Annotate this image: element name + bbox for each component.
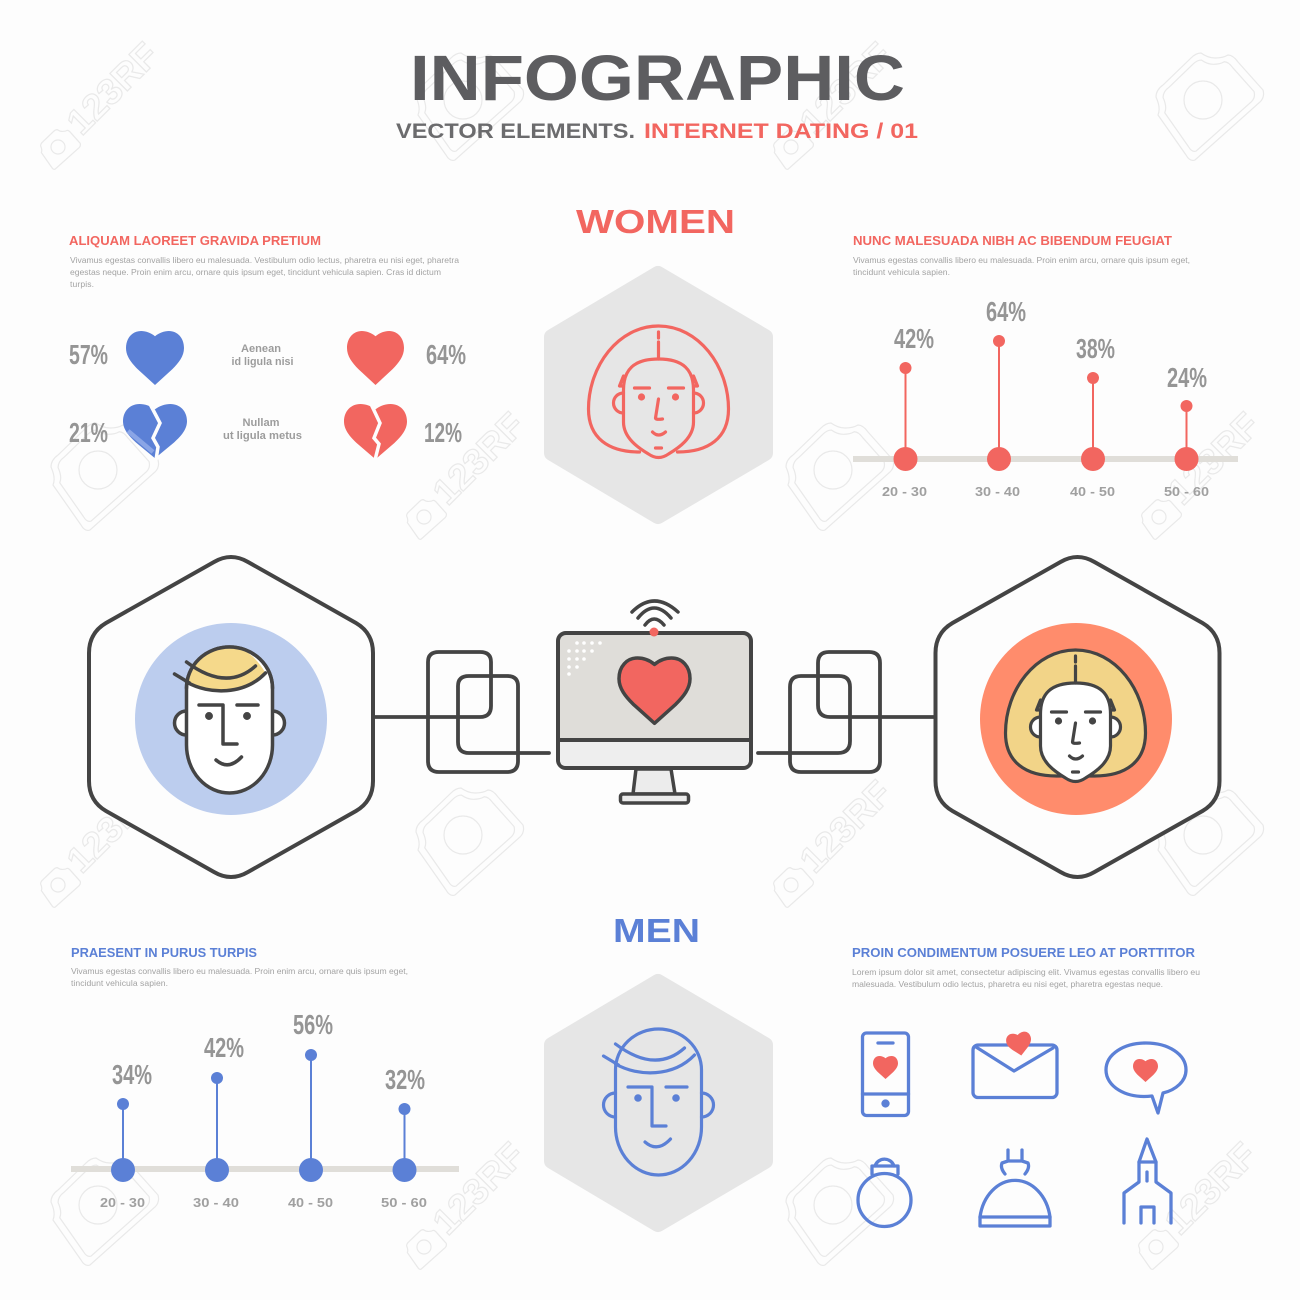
- chart: men lollipop chart: [71, 1009, 459, 1210]
- icon: man colored face: [174, 647, 284, 793]
- chart: women lollipop chart: 40 - 50: [1070, 485, 1115, 499]
- chart: women lollipop chart: 64%: [986, 296, 1026, 327]
- chart: women lollipop chart: 38%: [1076, 333, 1115, 364]
- icon: ring: [858, 1159, 911, 1226]
- stat: 57 percent: 57%: [69, 339, 108, 370]
- chart: men lollipop chart: 32%: [385, 1064, 425, 1095]
- icon: monitor heart: [619, 658, 690, 723]
- chart: men lollipop chart: 50 - 60: [381, 1196, 427, 1210]
- text block: hearts heading: [69, 233, 459, 289]
- label: nullam: Nullam: [242, 417, 280, 429]
- panel: men icons: [852, 945, 1200, 1226]
- panel: women hearts: [69, 233, 466, 460]
- label: nullam: [223, 417, 302, 442]
- icon: envelope: [973, 1031, 1057, 1098]
- chart: men lollipop chart: 34%: [112, 1059, 152, 1090]
- text block: women chart heading: tincidunt vehicula sapien.: [853, 267, 950, 277]
- panel: computer monitor: [558, 601, 751, 803]
- title: INFOGRAPHIC: [410, 42, 905, 114]
- text block: icons heading: Lorem ipsum dolor sit amet, consectetur adipiscing elit. Vivamus egestas convallis libero eu: [852, 967, 1200, 977]
- text: 123RF: [1156, 1134, 1264, 1242]
- text: 123RF: [424, 1134, 532, 1242]
- text: 123RF: [791, 34, 899, 142]
- icon: monitor stand: [620, 769, 688, 803]
- chart: men lollipop chart: 20 - 30: [100, 1196, 145, 1210]
- text block: hearts heading: turpis.: [70, 279, 94, 289]
- chart: women lollipop chart: 20 - 30: [882, 485, 927, 499]
- icon: woman colored face: [1006, 650, 1146, 782]
- panel: men age chart: [71, 945, 459, 1210]
- chart: women lollipop chart: 50 - 60: [1164, 485, 1209, 499]
- text block: women chart heading: NUNC MALESUADA NIBH AC BIBENDUM FEUGIAT: [853, 233, 1172, 248]
- chart: women lollipop chart: [853, 296, 1238, 499]
- stat: 64 percent: 64%: [426, 339, 466, 370]
- icon: red broken heart: [344, 404, 407, 460]
- text block: men chart heading: tincidunt vehicula sapien.: [71, 978, 168, 988]
- heading: men: MEN: [613, 912, 700, 949]
- panel: man hexagon: [89, 557, 373, 877]
- arrow: right connector cable: [758, 652, 935, 772]
- chart: men lollipop chart: 30 - 40: [193, 1196, 239, 1210]
- label: aenean: id ligula nisi: [232, 356, 294, 368]
- stat: 12 percent: 12%: [424, 417, 462, 448]
- text block: men chart heading: [71, 945, 408, 988]
- panel: woman portrait hexagon: [552, 274, 765, 516]
- icon: webcam dot: [650, 628, 658, 636]
- icon: phone: [862, 1033, 908, 1116]
- text: 123RF: [58, 34, 166, 142]
- icon: blue broken heart: [123, 404, 187, 460]
- text block: men chart heading: Vivamus egestas convallis libero eu malesuada. Proin enim arcu, ornare quis ipsum eget,: [71, 966, 408, 976]
- text: 123RF: [791, 772, 899, 880]
- chart: men lollipop chart: 40 - 50: [288, 1196, 333, 1210]
- text: 123RF: [58, 772, 166, 880]
- label: aenean: [232, 343, 294, 368]
- text: 123RF: [1159, 404, 1267, 512]
- subtitle: [396, 120, 918, 143]
- icon: wifi signal: [632, 601, 678, 625]
- text block: men chart heading: PRAESENT IN PURUS TURPIS: [71, 945, 257, 960]
- subtitle: INTERNET DATING / 01: [644, 120, 918, 143]
- chart: women lollipop chart: 42%: [894, 323, 934, 354]
- icon: man outline face: [604, 1029, 714, 1175]
- text block: women chart heading: [853, 233, 1190, 277]
- icon: church: [1124, 1139, 1171, 1223]
- label: nullam: ut ligula metus: [223, 430, 302, 442]
- icon: dress dome: [980, 1150, 1050, 1226]
- arrow: left connector cable: [374, 652, 549, 772]
- panel: woman hexagon: [936, 557, 1220, 877]
- text: 123RF: [424, 404, 532, 512]
- text block: hearts heading: ALIQUAM LAOREET GRAVIDA PRETIUM: [69, 233, 321, 248]
- label: aenean: Aenean: [241, 343, 281, 355]
- icon: speech bubble: [1106, 1043, 1186, 1113]
- text block: hearts heading: Vivamus egestas convallis libero eu malesuada. Vestibulum odio lectus, pharetra eu nisi eget, pharetra: [70, 255, 459, 265]
- text block: hearts heading: egestas neque. Proin enim arcu, ornare quis ipsum eget, tincidunt vehicula sapien. Cras id dictum: [70, 267, 441, 277]
- icon: blue heart: [126, 331, 184, 385]
- stat: 21 percent: 21%: [69, 417, 108, 448]
- panel: women age chart: [853, 233, 1238, 499]
- chart: men lollipop chart: 56%: [293, 1009, 333, 1040]
- subtitle: VECTOR ELEMENTS.: [396, 120, 635, 143]
- icon: red heart: [347, 331, 404, 385]
- panel: man portrait hexagon: [552, 982, 765, 1224]
- heading: women: WOMEN: [576, 203, 735, 240]
- chart: women lollipop chart: 24%: [1167, 362, 1207, 393]
- text block: icons heading: malesuada. Vestibulum odio lectus, pharetra eu nisi eget, pharetra egestas neque.: [852, 979, 1163, 989]
- text block: women chart heading: Vivamus egestas convallis libero eu malesuada. Proin enim arcu, ornare quis ipsum eget,: [853, 255, 1190, 265]
- text block: icons heading: [852, 945, 1200, 989]
- icon: woman outline face: [588, 326, 728, 458]
- chart: women lollipop chart: 30 - 40: [975, 485, 1020, 499]
- text block: icons heading: PROIN CONDIMENTUM POSUERE LEO AT PORTTITOR: [852, 945, 1196, 960]
- chart: men lollipop chart: 42%: [204, 1032, 244, 1063]
- icon: monitor body: [558, 633, 751, 768]
